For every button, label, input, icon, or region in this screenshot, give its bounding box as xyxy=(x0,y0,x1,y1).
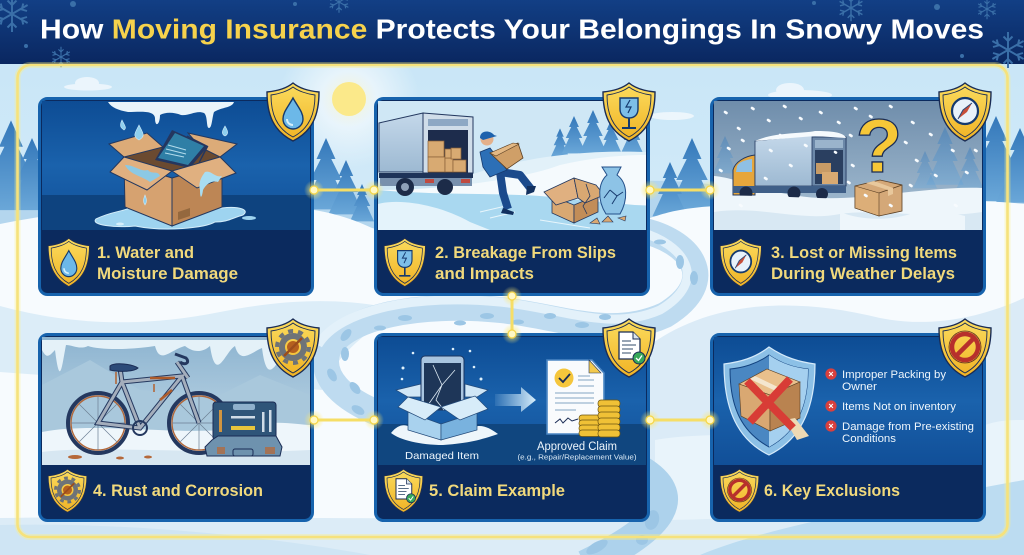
icon: compass shield small xyxy=(720,238,762,287)
title band text: 3. Lost or Missing Items xyxy=(771,243,957,262)
mover slipping xyxy=(480,132,536,215)
list: exclusions: × xyxy=(828,369,834,379)
title band text xyxy=(97,243,238,283)
title text: 5. Claim Example xyxy=(429,481,565,500)
panel 4: rust and corrosion xyxy=(40,319,319,520)
icon: claim document shield badge xyxy=(603,319,655,377)
icon: rusted gear shield badge xyxy=(267,319,319,377)
broken vase xyxy=(590,167,626,224)
approved claim document xyxy=(547,360,620,437)
connector: 2 to 5 xyxy=(502,286,522,344)
icon: water shield badge xyxy=(267,83,319,141)
list: exclusions: Conditions xyxy=(842,433,897,445)
list: exclusions xyxy=(825,368,974,445)
broken box xyxy=(544,178,604,223)
trees centre-right xyxy=(652,138,715,216)
icon: no sign shield small xyxy=(720,469,759,512)
trees left xyxy=(0,120,55,210)
illustration: damaged item to approved claim xyxy=(378,337,646,465)
sun xyxy=(279,29,419,169)
label: claim value note: (e.g., Repair/Replacement Value) xyxy=(518,452,637,462)
connector: 4 to 5 xyxy=(304,410,384,430)
illustration: wet box xyxy=(42,101,310,230)
header snowflakes xyxy=(0,0,1024,68)
title: How Moving Insurance Protects Your Belongings In Snowy Moves xyxy=(40,14,984,44)
icon: claim document shield small xyxy=(384,469,423,512)
illustration: truck, mover and broken vase xyxy=(378,101,646,230)
question mark: ? xyxy=(856,104,902,189)
icon: rusted gear shield small xyxy=(48,469,87,512)
connector: 5 to 6 xyxy=(640,410,720,430)
illustration: truck in snowstorm xyxy=(713,101,983,230)
clouds xyxy=(64,77,832,120)
illustration: rusty bike and toolbox xyxy=(42,337,310,465)
title text: 6. Key Exclusions xyxy=(764,481,900,500)
title band text: During Weather Delays xyxy=(771,264,955,283)
connector: 1 to 2 xyxy=(304,180,384,200)
label: damaged item: Damaged Item xyxy=(405,450,479,462)
panel 6: key exclusions xyxy=(712,319,991,520)
icon: water shield small xyxy=(48,238,90,287)
list: exclusions: Owner xyxy=(842,381,877,393)
title band text xyxy=(771,243,957,283)
trees centre-left xyxy=(303,138,374,221)
title band text: Moisture Damage xyxy=(97,264,238,283)
list: exclusions: Items Not on inventory xyxy=(842,401,957,413)
title band text: 2. Breakage From Slips xyxy=(435,243,616,262)
footprints xyxy=(325,240,698,555)
trees right xyxy=(968,116,1024,203)
header banner xyxy=(0,0,1024,68)
arrow xyxy=(495,387,536,412)
list: exclusions: Improper Packing by xyxy=(842,369,947,381)
winding snow path xyxy=(318,230,695,555)
list: exclusions: Damage from Pre-existing xyxy=(842,421,974,433)
title band text: and Impacts xyxy=(435,264,534,283)
title text: 4. Rust and Corrosion xyxy=(93,481,263,500)
icon: fragile glass shield badge xyxy=(603,83,655,141)
title band text xyxy=(435,243,616,283)
panel 3: lost items xyxy=(712,83,991,294)
panel 2: breakage xyxy=(376,83,655,294)
icon: no sign shield badge xyxy=(939,319,991,377)
label: approved claim: Approved Claim xyxy=(537,441,617,453)
damaged item xyxy=(391,348,498,445)
icon: fragile glass shield small xyxy=(384,238,426,287)
illustration: shield with crossed box xyxy=(714,337,982,465)
list: exclusions: × xyxy=(828,421,834,431)
snowfall xyxy=(720,106,976,206)
icon: compass shield badge xyxy=(939,83,991,141)
panel 5: claim example xyxy=(376,319,655,520)
panel 1: water and moisture damage xyxy=(40,83,319,294)
list: exclusions: × xyxy=(828,401,834,411)
connector: 2 to 3 xyxy=(640,180,720,200)
title band text: 1. Water and xyxy=(97,243,194,262)
